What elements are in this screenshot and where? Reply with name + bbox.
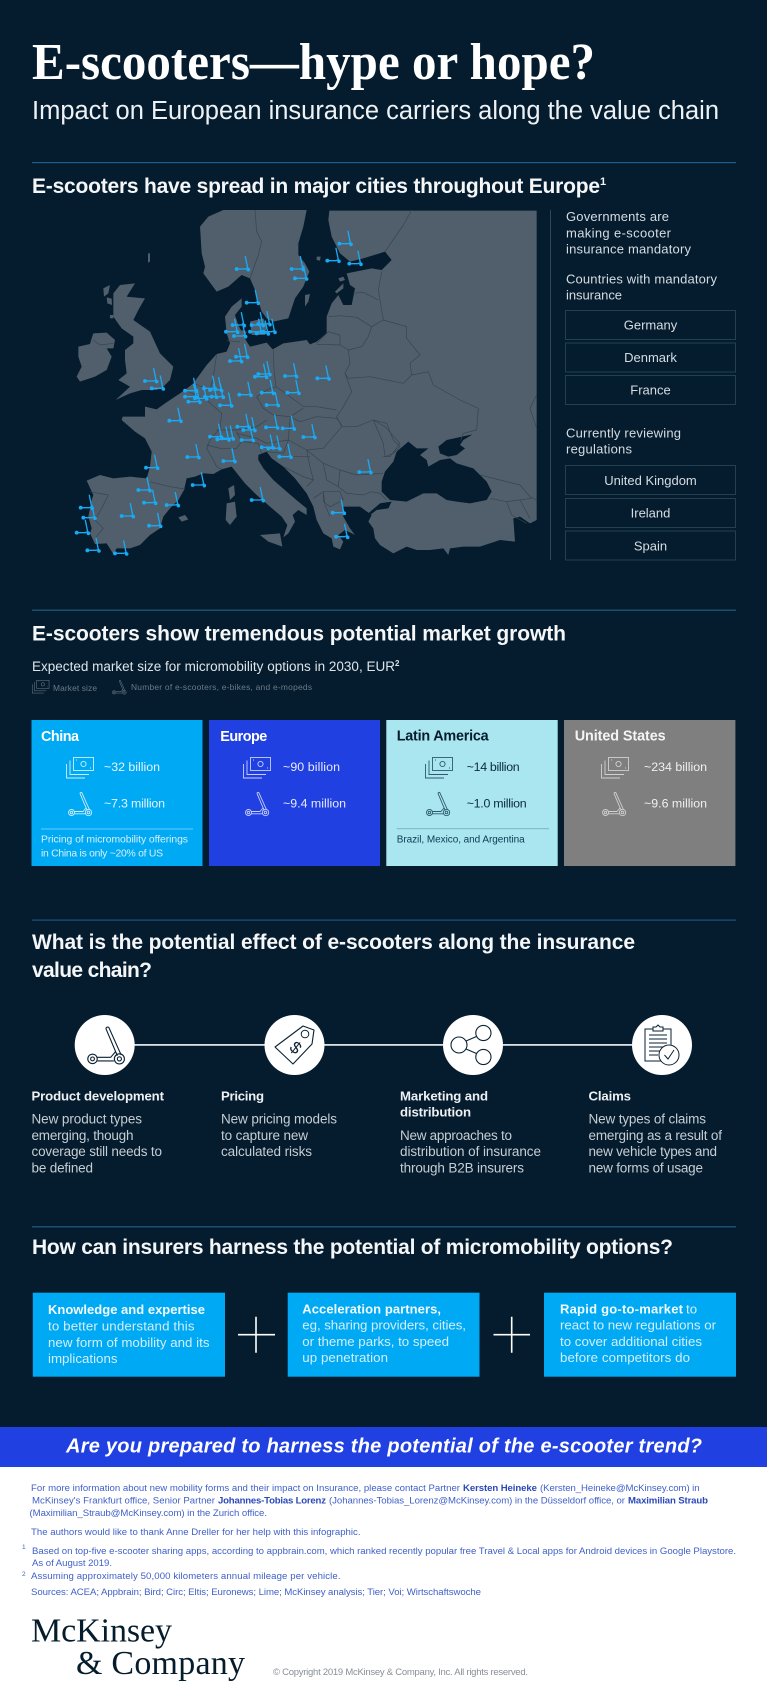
box: Denmark [566, 343, 736, 372]
footer panel [0, 1467, 767, 1692]
contact text: Johannes-Tobias Lorenz [218, 1495, 326, 1506]
step: marketing and distribution: through B2B insurers [400, 1161, 524, 1176]
card: China: in China is only ~20% of US [41, 849, 163, 860]
banner: Are you prepared to harness the potential of the e-scooter trend? [65, 1436, 702, 1458]
icon: clipboard with check [632, 1015, 692, 1075]
heading: value chain: What is the potential effect of e-scooters along the insurance [32, 931, 635, 954]
legend [32, 680, 312, 694]
contact text: Kersten Heineke [463, 1483, 537, 1494]
box: Spain [566, 531, 736, 560]
sources: Sources: ACEA; Appbrain; Bird; Circ; Eltis; Euronews; Lime; McKinsey analysis; Tier; Voi; Wirtschaftswoche [31, 1587, 481, 1598]
card: Europe: Europe [220, 729, 267, 745]
icon: price tag: $ [286, 1037, 306, 1058]
panel: regulation status [566, 209, 736, 560]
contact text [30, 1483, 708, 1519]
step: claims: new vehicle types and [588, 1144, 717, 1159]
card: Latin America: ~14 billion [467, 760, 520, 774]
card: United States: ~234 billion [644, 760, 707, 774]
chart subtitle: Expected market size for micromobility options in 2030, EUR [32, 659, 395, 674]
box: Germany [566, 310, 736, 340]
footnote 2: Assuming approximately 50,000 kilometers annual mileage per vehicle. [31, 1571, 340, 1582]
footnote 1: Based on top-five e-scooter sharing apps, according to appbrain.com, which ranked recently popular free Travel & Local apps for Android devices in Google Playstore. [32, 1546, 736, 1557]
card: Latin America: Brazil, Mexico, and Argentina [397, 835, 525, 846]
box: acceleration partners: up penetration [302, 1350, 388, 1365]
value chain connector [134, 1044, 632, 1046]
step: pricing [221, 1015, 337, 1159]
box: acceleration partners: or theme parks, to speed [302, 1334, 449, 1349]
card: China: ~32 billion [104, 760, 160, 774]
step: product development: emerging, though [32, 1128, 134, 1143]
heading: map section: E-scooters have spread in major cities throughout Europe [32, 175, 600, 198]
scooter markers [75, 231, 372, 555]
card: United States: United States [575, 729, 666, 745]
box: Denmark: Denmark [624, 350, 677, 365]
step: marketing and distribution [400, 1015, 541, 1176]
text: currently reviewing [566, 426, 681, 457]
heading: value chain [32, 931, 635, 982]
box: Germany: Germany [624, 318, 678, 332]
chart subtitle: 2 [395, 659, 400, 668]
step: pricing: New pricing models [221, 1111, 337, 1126]
text: currently reviewing: Currently reviewing [566, 426, 681, 441]
text: governments [566, 209, 692, 256]
legend: Market size [53, 683, 97, 693]
logo [31, 1613, 245, 1682]
box: acceleration partners [288, 1293, 480, 1377]
card: United States [564, 720, 735, 866]
card: China: Pricing of micromobility offerings [41, 835, 188, 846]
step: marketing and distribution: Marketing and [400, 1089, 488, 1104]
banner [0, 1427, 767, 1467]
step: claims [588, 1015, 722, 1176]
card: Latin America: Latin America [397, 729, 490, 745]
text: currently reviewing: regulations [566, 442, 632, 457]
icon: scooter [75, 1015, 135, 1075]
box: United Kingdom [566, 466, 736, 494]
card: Europe: ~9.4 million [283, 797, 346, 811]
box: rapid go-to-market: react to new regulations or [560, 1318, 717, 1333]
subtitle: Impact on European insurance carriers along the value chain [32, 97, 719, 125]
plus sign 2 [494, 1317, 530, 1353]
card: Latin America [386, 720, 558, 866]
box: knowledge and expertise: Knowledge and expertise [48, 1302, 205, 1317]
step: claims: new forms of usage [588, 1161, 703, 1176]
box: Spain: Spain [634, 538, 667, 553]
step: marketing and distribution: New approaches to [400, 1128, 512, 1143]
step: claims: Claims [588, 1089, 631, 1104]
box: rapid go-to-market: to cover additional cities [560, 1334, 702, 1349]
box: France [566, 376, 736, 404]
heading: market growth: E-scooters show tremendous potential market growth [32, 623, 566, 646]
step: marketing and distribution: distribution of insurance [400, 1144, 541, 1159]
heading: map section: 1 [600, 176, 606, 188]
step: marketing and distribution: distribution [400, 1105, 471, 1120]
step: product development [32, 1015, 165, 1176]
logo: McKinsey [31, 1613, 172, 1650]
title: E-scooters—hype or hope? [32, 33, 595, 90]
contact text: (Johannes-Tobias_Lorenz@McKinsey.com) in the Düsseldorf office, or [329, 1495, 626, 1506]
footnote 1: 1 [22, 1544, 26, 1551]
contact text: Maximilian Straub [628, 1495, 708, 1506]
plus sign 1 [238, 1317, 275, 1353]
step: pricing: calculated risks [221, 1144, 312, 1159]
card: China: ~7.3 million [104, 797, 165, 811]
thanks: The authors would like to thank Anne Dreller for her help with this infographic. [31, 1527, 360, 1538]
legend: Number of e-scooters, e-bikes, and e-mopeds [131, 682, 312, 692]
icon: scooter [112, 680, 126, 694]
contact text: For more information about new mobility forms and their impact on Insurance, please contact Partner [31, 1483, 461, 1494]
text: countries with mandatory insurance [566, 271, 718, 302]
box: knowledge and expertise: to better understand this [48, 1319, 195, 1334]
box: knowledge and expertise [33, 1293, 225, 1377]
box: knowledge and expertise: new form of mobility and its [48, 1335, 210, 1350]
card: China: China [41, 729, 80, 745]
card: United States: ~9.6 million [644, 797, 707, 811]
footnote 2: 2 [22, 1571, 26, 1578]
copyright: © Copyright 2019 McKinsey & Company, Inc. All rights reserved. [273, 1667, 528, 1678]
heading: harness potential: How can insurers harness the potential of micromobility options? [32, 1236, 673, 1259]
logo: & Company [76, 1645, 245, 1682]
step: product development: be defined [32, 1161, 93, 1176]
icon: price tag [264, 1015, 324, 1075]
step: claims: emerging as a result of [588, 1128, 722, 1143]
seas overlay [368, 434, 492, 515]
step: pricing: to capture new [221, 1128, 308, 1143]
box: Ireland [566, 498, 736, 528]
text: governments: making e-scooter [566, 225, 672, 240]
country borders [90, 210, 537, 538]
text: countries with mandatory insurance: Countries with mandatory [566, 271, 718, 286]
text: governments: Governments are [566, 209, 669, 224]
box: France: France [630, 383, 671, 398]
box: rapid go-to-market: before competitors do [560, 1350, 690, 1365]
box: United Kingdom: United Kingdom [604, 473, 697, 488]
box: rapid go-to-market: to [686, 1301, 697, 1316]
contact text: McKinsey's Frankfurt office, Senior Partner [32, 1495, 216, 1506]
box: rapid go-to-market [544, 1293, 736, 1377]
step: product development: coverage still needs to [32, 1144, 162, 1159]
box: Ireland: Ireland [631, 506, 670, 521]
icon: money [32, 680, 49, 693]
contact text: (Kersten_Heineke@McKinsey.com) in [540, 1483, 700, 1494]
box: knowledge and expertise: implications [48, 1351, 118, 1366]
map of Europe with scooter markers [75, 210, 537, 555]
text: governments: insurance mandatory [566, 241, 692, 256]
box: acceleration partners: Acceleration partners, [302, 1301, 441, 1316]
footnote 1: As of August 2019. [32, 1558, 112, 1569]
land masses [77, 210, 537, 555]
card: Latin America: ~1.0 million [467, 797, 527, 811]
box: acceleration partners: eg, sharing providers, cities, [302, 1318, 466, 1333]
step: pricing: Pricing [221, 1089, 264, 1104]
heading: value chain: value chain? [32, 959, 152, 982]
icon: share network [443, 1015, 503, 1075]
text: countries with mandatory insurance: insurance [566, 287, 622, 302]
card: China [32, 720, 202, 866]
footnote 1 [22, 1544, 736, 1569]
step: product development: New product types [32, 1111, 142, 1126]
step: claims: New types of claims [588, 1111, 706, 1126]
contact text: (Maximilian_Straub@McKinsey.com) in the Zurich office. [30, 1508, 267, 1519]
card: Europe [209, 720, 380, 866]
card: Europe: ~90 billion [283, 760, 340, 774]
box: rapid go-to-market: Rapid go-to-market [560, 1301, 684, 1316]
step: product development: Product development [32, 1089, 165, 1104]
